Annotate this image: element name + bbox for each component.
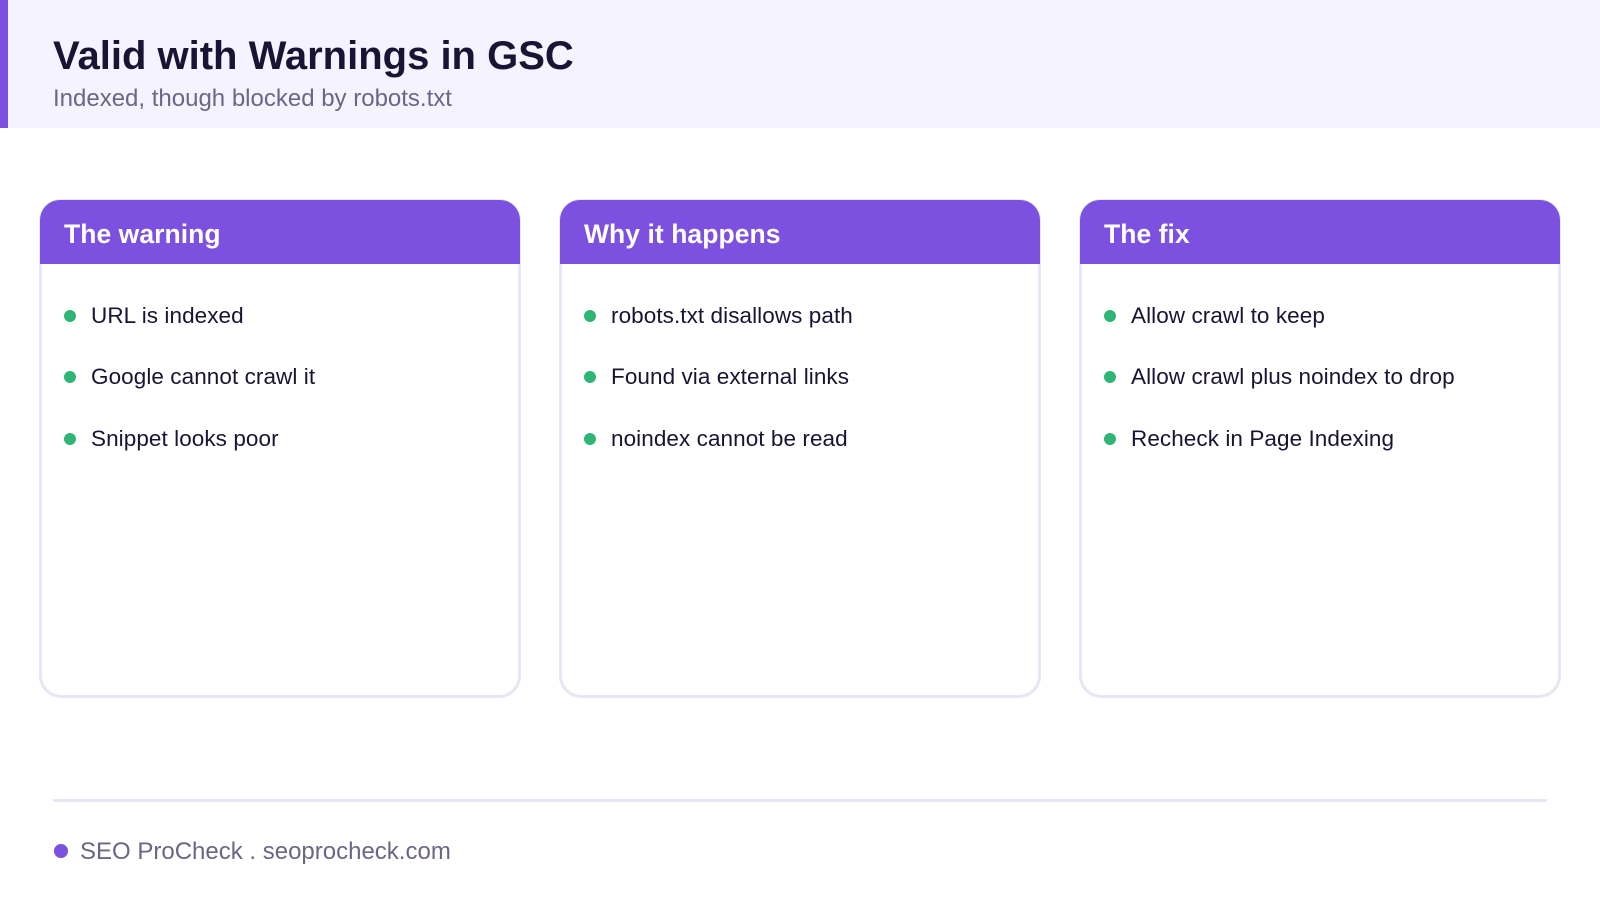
panel heading: why it happens: [560, 200, 1040, 264]
panel heading: the warning: [40, 200, 520, 264]
panel: the fix: [1079, 199, 1561, 698]
panel: why it happens: [559, 199, 1041, 698]
list item: robots.txt disallows path: robots.txt disallows path: [611, 303, 853, 328]
list item: URL is indexed: URL is indexed: [91, 303, 244, 328]
list item: Google cannot crawl it: Google cannot crawl it: [91, 364, 315, 389]
header band: [0, 0, 1600, 128]
list item: noindex cannot be read: noindex cannot be read: [611, 426, 848, 451]
panel heading: the warning: The warning: [64, 219, 221, 249]
list item: Recheck in Page Indexing: Recheck in Page Indexing: [1131, 426, 1394, 451]
accent bar: [0, 0, 8, 128]
panel heading: the fix: [1080, 200, 1560, 264]
subtitle: Indexed, though blocked by robots.txt: [53, 85, 452, 112]
icon: brand dot: [54, 844, 68, 858]
list item: Allow crawl plus noindex to drop: Allow crawl plus noindex to drop: [1131, 364, 1455, 389]
footer text: SEO ProCheck . seoprocheck.com: [80, 838, 451, 865]
list item: Allow crawl to keep: Allow crawl to keep: [1131, 303, 1325, 328]
panel heading: the fix: The fix: [1104, 219, 1190, 249]
title: Valid with Warnings in GSC: [53, 34, 574, 78]
panel heading: why it happens: Why it happens: [584, 219, 781, 249]
footer brand: [54, 838, 451, 865]
list item: Snippet looks poor: Snippet looks poor: [91, 426, 279, 451]
list item: Found via external links: Found via external links: [611, 364, 849, 389]
panel: the warning: [39, 199, 521, 698]
